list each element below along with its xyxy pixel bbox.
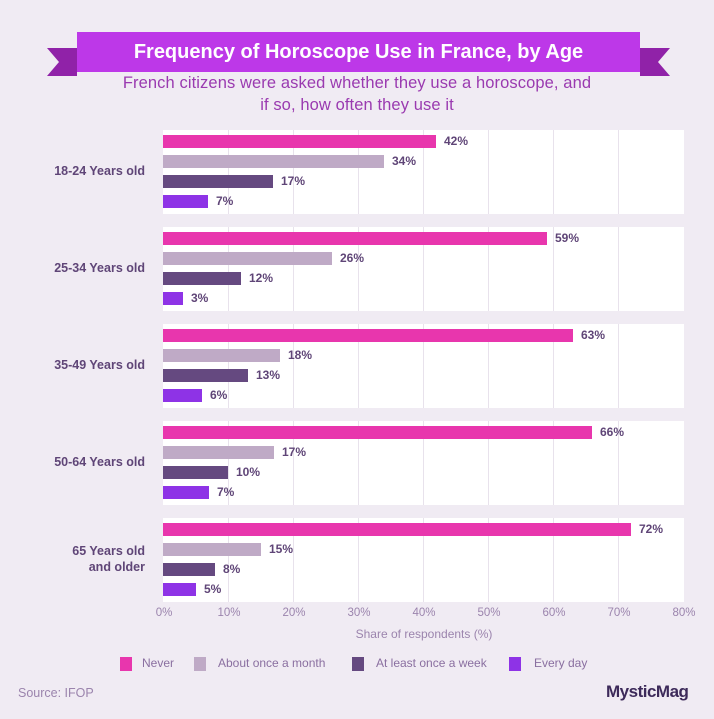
x axis ticks: 80%	[672, 607, 696, 619]
source: Source: IFOP	[18, 686, 94, 700]
panel: 35-49: 35-49 Years old	[54, 358, 145, 372]
panel: 35-49: 13%	[256, 368, 280, 382]
logo: MysticMag	[606, 682, 688, 701]
panel: 25-34: 59%	[555, 231, 579, 245]
panel: 65+	[72, 518, 684, 602]
panel: 35-49: 6%	[210, 388, 227, 402]
panel: 25-34: 26%	[340, 251, 364, 265]
panel: 50-64: 7%	[217, 485, 234, 499]
panel: 65+: 8%	[223, 562, 240, 576]
subtitle	[123, 74, 591, 114]
panel: 18-24: 34%	[392, 154, 416, 168]
panel: 25-34: 25-34 Years old	[54, 261, 145, 275]
legend: Never	[142, 656, 174, 670]
panel: 65+: 15%	[269, 542, 293, 556]
legend: About once a month	[218, 656, 325, 670]
legend	[120, 656, 588, 671]
panel: 25-34	[54, 227, 684, 311]
x axis ticks: 10%	[217, 607, 241, 619]
panel: 25-34: 3%	[191, 291, 208, 305]
x axis ticks: 20%	[282, 607, 306, 619]
panel: 18-24: 7%	[216, 194, 233, 208]
subtitle: French citizens were asked whether they use a horoscope, and	[123, 74, 591, 92]
x axis ticks: 30%	[347, 607, 371, 619]
panel: 65+: 65 Years old	[72, 544, 145, 558]
x axis ticks: 0%	[156, 607, 172, 619]
panel: 50-64: 10%	[236, 465, 260, 479]
panel: 25-34: 12%	[249, 271, 273, 285]
panel: 65+: and older	[89, 560, 145, 574]
panel: 35-49: 63%	[581, 328, 605, 342]
panel: 18-24: 17%	[281, 174, 305, 188]
panel: 50-64: 17%	[282, 445, 306, 459]
panel: 65+: 5%	[204, 582, 221, 596]
title text: Frequency of Horoscope Use in France, by Age	[134, 41, 583, 63]
panel: 18-24: 42%	[444, 134, 468, 148]
title banner	[47, 32, 670, 76]
panel: 18-24: 18-24 Years old	[54, 164, 145, 178]
x axis ticks: 50%	[477, 607, 501, 619]
x axis ticks: 70%	[607, 607, 631, 619]
panel: 18-24	[54, 130, 684, 214]
legend: Every day	[534, 656, 587, 670]
panel: 35-49: 18%	[288, 348, 312, 362]
axis title: Share of respondents (%)	[356, 627, 492, 641]
subtitle: if so, how often they use it	[260, 96, 454, 114]
panel: 35-49	[54, 324, 684, 408]
x axis ticks: 60%	[542, 607, 566, 619]
panel: 65+: 72%	[639, 522, 663, 536]
panel: 50-64: 66%	[600, 425, 624, 439]
panel: 50-64	[54, 421, 684, 505]
x axis ticks: 40%	[412, 607, 436, 619]
panel: 50-64: 50-64 Years old	[54, 455, 145, 469]
legend: At least once a week	[376, 656, 487, 670]
